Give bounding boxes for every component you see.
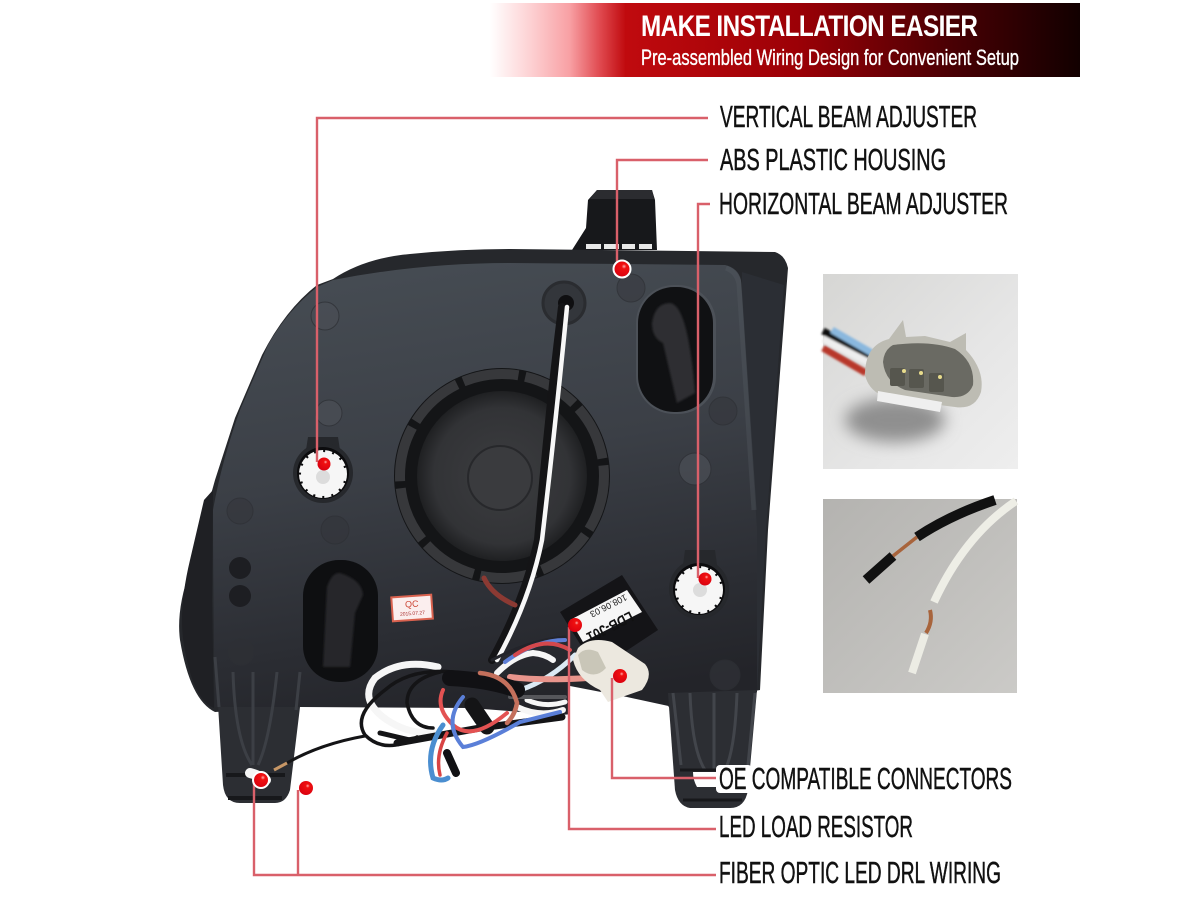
banner: make installation easier [490, 3, 1080, 77]
vents [229, 557, 251, 607]
QC sticker: 2015.07.27 [400, 610, 425, 618]
banner heading: MAKE INSTALLATION EASIER [641, 9, 978, 43]
LED load resistor module [560, 575, 658, 660]
panel bevel [726, 268, 754, 510]
left dark edge [182, 490, 214, 708]
bulb cover [394, 368, 610, 584]
OE connector [573, 640, 649, 702]
upper adjuster opening [636, 285, 716, 414]
label: led load resistor: LED LOAD RESISTOR [719, 809, 913, 844]
moulded bumps [227, 274, 740, 690]
side panel [740, 272, 784, 690]
label: horizontal beam adjuster: HORIZONTAL BEAM ADJUSTER [719, 186, 1008, 221]
right mounting foot [668, 690, 757, 808]
wiring loom from grommet [484, 307, 567, 660]
connector body [865, 320, 982, 407]
wire harness bundle [361, 637, 612, 780]
label: abs plastic housing: ABS PLASTIC HOUSING [720, 142, 946, 177]
grommet [543, 282, 585, 324]
callout leader lines [254, 118, 716, 875]
white gap below housing [570, 686, 670, 730]
LED load resistor module: 108.06.03 [588, 592, 629, 619]
top mounting tab [572, 190, 657, 250]
photo: oe connector [823, 274, 1018, 469]
QC sticker: QC [405, 599, 419, 609]
lower adjuster opening [303, 560, 378, 682]
LED load resistor module: LDB-J01 [584, 607, 636, 645]
black fiber optic wire [250, 736, 365, 780]
QC sticker [391, 595, 433, 621]
right beam adjuster knob [669, 550, 729, 619]
label: vertical beam adjuster: VERTICAL BEAM ADJUSTER [720, 99, 977, 134]
left mounting foot [215, 657, 300, 803]
main back panel [213, 263, 757, 715]
connector wires [823, 330, 872, 373]
connector pins [890, 368, 944, 392]
label: fiber optic led drl wiring: FIBER OPTIC LED DRL WIRING [719, 855, 1001, 890]
black wire [866, 500, 995, 580]
banner subheading: Pre-assembled Wiring Design for Convenient Setup [641, 45, 1019, 70]
left beam adjuster knob [293, 437, 353, 503]
housing outer rim [179, 249, 788, 712]
white wire [912, 501, 1016, 673]
photo: cut wires [823, 499, 1017, 693]
marker dots [253, 260, 712, 795]
headlight housing rear view [179, 190, 788, 808]
label: oe compatible connectors: OE COMPATIBLE CONNECTORS [719, 761, 1012, 796]
